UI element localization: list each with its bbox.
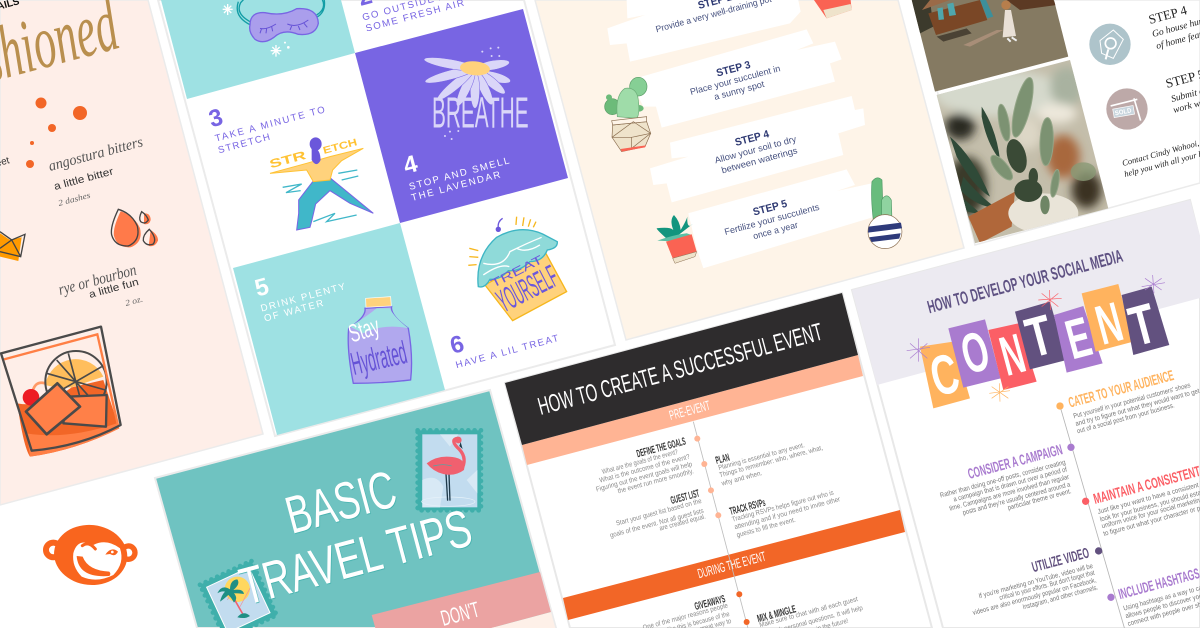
- text: utilize video: UTILIZE VIDEO: [1030, 546, 1091, 576]
- title: content letters: T: [1123, 292, 1163, 359]
- text: cater to your audience: out of a social post from your business.: [1076, 402, 1175, 435]
- panel: old fashioned cocktail card: [0, 0, 263, 505]
- panel: successful event card: [505, 293, 932, 628]
- title: content letters: E: [1059, 305, 1098, 371]
- text: step 5: Fertilize your succulents: [723, 202, 821, 237]
- text: rye or bourbon ingredient: rye or bourbon: [57, 262, 138, 299]
- icon: sold sign circle: SOLD: [1114, 107, 1132, 117]
- icon: palm tree stamp: [200, 561, 277, 628]
- panel: succulent care steps card: [535, 0, 964, 340]
- text: plan: Things to remember: who, where, what,: [719, 445, 824, 479]
- title: basic travel tips: [234, 460, 478, 617]
- text: tip 6: HAVE A LIL TREAT: [455, 333, 560, 371]
- panel: basic travel tips card: [155, 390, 556, 628]
- icon: stretching figure: [268, 137, 373, 230]
- text: tip 4: 4: [401, 150, 421, 180]
- text: define the goals: What is the outcome of the event?: [599, 454, 691, 485]
- icon: treat yourself cupcake: [468, 217, 567, 321]
- text: track rsvps: attending and if you need to invite other: [734, 496, 842, 531]
- icon: orange bitters dots: [26, 98, 87, 168]
- panel: social media content card: [852, 200, 1200, 628]
- text: consider a campaign: posts and they're usually centered around a: [962, 481, 1071, 517]
- title: content letters: C: [924, 342, 966, 409]
- text: guest list: are created equal.: [659, 513, 707, 533]
- text: maintain a consistent voice: [1092, 456, 1200, 538]
- icon: red pot aloe: [657, 215, 697, 263]
- text: step 4: STEP 4: [1147, 2, 1189, 27]
- icon: stretching figure: ETCH: [322, 137, 359, 157]
- text: consider a campaign: CONSIDER A CAMPAIGN: [966, 442, 1064, 483]
- text: track rsvps: Tracking RSVPs helps figure out who is: [731, 490, 835, 524]
- text: tip 3: STRETCH: [217, 132, 271, 156]
- text: tip 5: 5: [252, 273, 272, 302]
- photo: tiny cabin: [912, 0, 1068, 92]
- text: utilize video: critical to your efforts. But don't forget that: [999, 570, 1096, 602]
- text: consider a campaign: Rather than doing one-off posts, consider creating: [939, 459, 1066, 500]
- text: step 4: STEP 4: [734, 128, 771, 149]
- icon: house search circle: [1089, 24, 1131, 65]
- text: utilize video: If you're marketing on YouTube, video will be: [978, 563, 1094, 600]
- text: step 4: Allow your soil to dry: [714, 134, 798, 165]
- text: step 3: a sunny spot: [713, 79, 766, 102]
- icon: striped round pot cactus: [868, 178, 902, 249]
- text: utilize video: videos are also enormously popular on Facebook,: [972, 577, 1097, 617]
- text: guest list: goals of the event. Not all guest lists: [609, 508, 705, 540]
- text: plan: [714, 442, 824, 488]
- icon: geometric pot cactus: [605, 77, 651, 152]
- text: define the goals: [595, 436, 695, 495]
- text: guest list: GUEST LIST: [669, 488, 701, 507]
- text: angostura bitters ingredient: angostura bitters: [47, 134, 145, 175]
- title: basic travel tips: BASIC: [279, 460, 403, 546]
- text: guest list: Start your guest list based on the: [615, 498, 703, 528]
- text: track rsvps: TRACK RSVPs: [728, 497, 767, 518]
- text: mix and mingle: MIX & MINGLE: [756, 603, 797, 625]
- text: plan: PLAN: [714, 452, 731, 467]
- brush strokes behind steps: [607, 0, 875, 268]
- text: tip 3: 3: [206, 104, 226, 133]
- icon: sleep mask: [223, 0, 325, 57]
- text: step 5: once a year: [752, 220, 799, 241]
- text: angostura bitters ingredient: 2 dashes: [57, 190, 92, 208]
- panel: real estate steps card: [900, 0, 1200, 247]
- icon: stay hydrated bottle: Stay: [345, 312, 383, 348]
- timeline: [693, 422, 750, 628]
- title: content letters: [907, 275, 1169, 409]
- text: utilize video: Instagram, and other channels.: [1022, 584, 1099, 611]
- panel: self-care tips card: YOURSELF: [491, 258, 564, 319]
- text: consider a campaign: a campaign that is drawn out over a period of: [953, 466, 1068, 504]
- text: tip 6: 6: [447, 330, 467, 360]
- text: rye or bourbon ingredient: 2 oz.: [124, 294, 144, 308]
- text: rye or bourbon ingredient: a little fun: [88, 276, 140, 301]
- label: during the event: DURING THE EVENT: [696, 549, 767, 581]
- text: giveaways: GIVEAWAYS: [693, 593, 727, 613]
- text: cater to your audience: [1067, 368, 1200, 435]
- text: rye or bourbon ingredient: [57, 262, 144, 308]
- text: step 4: [1147, 2, 1200, 52]
- text: track rsvps: guests to fill the event.: [736, 517, 796, 539]
- panel: self-care tips card: BREATHE: [432, 89, 529, 137]
- timeline: [1056, 402, 1125, 628]
- text: tip 4: STOP AND SMELL: [408, 155, 511, 193]
- text: define the goals: What are the goals of the event?: [601, 449, 679, 476]
- text: plan: why and when.: [720, 470, 763, 488]
- panel: don't band: [372, 572, 555, 628]
- text: tip 5: [252, 273, 347, 325]
- text: include hashtags: [1117, 566, 1200, 628]
- text: plan: Planning is essential to any event.: [718, 442, 806, 472]
- title: content letters: O: [954, 318, 996, 386]
- icon: stay hydrated bottle: [345, 297, 412, 383]
- text: track rsvps: [728, 490, 842, 539]
- photo: potted cactus: [936, 60, 1108, 244]
- text: step 5: [1164, 66, 1200, 116]
- text: angostura bitters ingredient: a little bitter: [53, 165, 115, 193]
- text: consider a campaign: [939, 442, 1072, 517]
- text: step 4: [714, 128, 799, 175]
- text: define the goals: DEFINE THE GOALS: [635, 436, 687, 460]
- text: step 4: between waterings: [720, 145, 799, 175]
- text: define the goals: Figuring out the event goals will help: [595, 461, 693, 494]
- text: consider a campaign: particular theme or event.: [1007, 488, 1072, 512]
- text: consider a campaign: time. Campaigns are more involved than regular: [949, 474, 1070, 513]
- icon: old fashioned glass: [1, 327, 121, 457]
- title: content letters: T: [1019, 304, 1059, 370]
- title: content letters: N: [994, 321, 1031, 388]
- text: guest list: [609, 488, 707, 540]
- icon: flamingo stamp: [418, 430, 481, 510]
- text: define the goals: the event run more smoothly.: [617, 468, 695, 495]
- title: content letters: N: [1089, 290, 1129, 357]
- icon: picmonkey logo: [46, 521, 135, 589]
- icon: orange drops: [111, 209, 158, 247]
- text: utilize video: [972, 546, 1099, 617]
- panel: self-care tips card: Hydrated: [347, 334, 410, 382]
- icon: red pot top: [814, 0, 852, 18]
- icon: stretching figure: STR: [268, 148, 308, 171]
- icon: treat yourself cupcake: TREAT: [488, 252, 546, 291]
- icon: sold sign circle: [1106, 88, 1148, 130]
- text: tip 3: TAKE A MINUTE TO: [214, 104, 327, 145]
- title: how to create a successful event: HOW TO CREATE A SUCCESSFUL EVENT: [535, 319, 826, 421]
- text: tip 4: THE LAVENDAR: [410, 170, 502, 204]
- text: step 3: Place your succulent in: [689, 63, 781, 97]
- text: giveaways: [632, 593, 732, 628]
- text: tip 5: DRINK PLENTY: [260, 281, 347, 315]
- text: tip 4: [401, 150, 511, 204]
- panel: self-care tips card: [158, 0, 615, 436]
- text: step 5: STEP 5: [752, 198, 789, 219]
- label: pre-event: PRE-EVENT: [668, 398, 712, 423]
- icon: citrus slice fragment: [0, 232, 25, 261]
- text: step 3: STEP 3: [715, 59, 752, 80]
- text: tip 5: OF WATER: [263, 298, 325, 325]
- icon: breathe flower: [423, 47, 529, 140]
- title: basic travel tips: TRAVEL TIPS: [234, 499, 478, 617]
- text: angostura bitters ingredient: [47, 134, 145, 208]
